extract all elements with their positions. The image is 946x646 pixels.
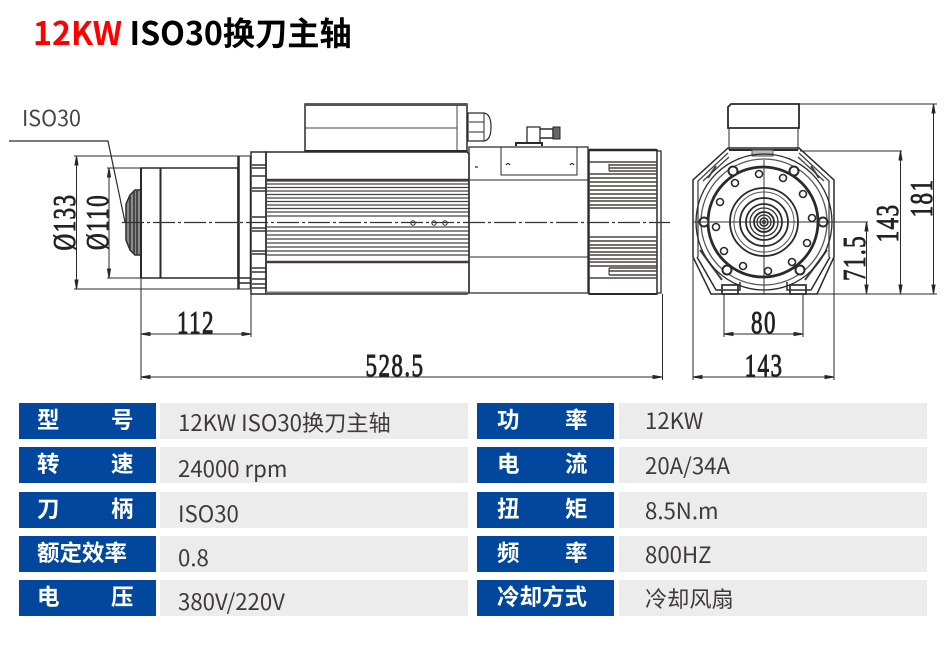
spec row: 扭矩: 矩 [565, 492, 588, 524]
spec row: 扭矩: 8.5N.m [645, 494, 719, 526]
dimension 71.5: 71.5 [837, 235, 873, 281]
spec row: 功率 [477, 403, 927, 439]
terminal box [305, 104, 467, 152]
spec row: 刀柄: 刀 [37, 492, 60, 524]
dimension 181 [799, 104, 940, 294]
dimension 80 [724, 294, 803, 341]
spec row: 冷却方式: 冷却风扇 [645, 582, 734, 614]
center line [122, 222, 670, 224]
dimension 112 [141, 278, 251, 380]
dimension 528.5 [141, 294, 662, 384]
dimension 143 width [693, 257, 834, 384]
spec row: 功率: 功 [497, 403, 520, 435]
spec row: 电压: 压 [111, 580, 134, 612]
spec row: 电流: 流 [565, 447, 588, 479]
spec row: 功率: 率 [565, 403, 588, 435]
spec row: 型号: 12KW ISO30换刀主轴 [178, 406, 391, 438]
ISO30 leader line [9, 141, 125, 222]
spec row: 冷却方式: 冷却方式 [497, 580, 587, 612]
spec row: 额定效率: 额定效率 [37, 536, 127, 568]
side view of spindle [122, 104, 670, 294]
spec row: 转速: 转 [37, 447, 60, 479]
chuck housing [141, 156, 251, 289]
dimension 143 height: 143 [870, 204, 906, 242]
spec row: 转速: 24000 rpm [178, 452, 287, 484]
spec row: 功率: 12KW [645, 404, 703, 436]
dimension 143 width: 143 [745, 348, 783, 384]
spec row: 扭矩 [477, 492, 927, 528]
air fitting [516, 127, 560, 146]
cross center lines [693, 160, 868, 294]
spec row: 电压: 电 [37, 580, 60, 612]
spec row: 频率 [477, 536, 927, 572]
dimension Ø110: Ø110 [80, 194, 116, 250]
spec row: 转速 [19, 447, 468, 484]
terminal box top [728, 104, 799, 150]
spec row: 型号: 号 [111, 403, 134, 435]
middle section [469, 147, 588, 293]
dimension 112: 112 [177, 305, 215, 341]
concentric rings [696, 154, 832, 290]
spec row: 电压 [19, 580, 468, 617]
cable gland [468, 113, 491, 141]
spec row: 刀柄: ISO30 [178, 497, 239, 529]
spindle nose [126, 190, 141, 255]
title: 12KW ISO30换刀主轴 [33, 9, 352, 55]
fan cover [589, 150, 661, 294]
technical drawing [9, 102, 940, 384]
spec row: 电流 [477, 447, 927, 483]
spec row: 电流: 20A/34A [645, 449, 730, 481]
spec row: 频率: 800HZ [645, 538, 711, 570]
small bolts [712, 170, 816, 274]
spec row: 转速: 速 [111, 447, 134, 479]
spec row: 扭矩: 扭 [497, 492, 520, 524]
spec row: 型号 [19, 403, 468, 439]
spec row: 冷却方式 [477, 580, 927, 616]
octagonal housing [693, 148, 834, 294]
dimension Ø133: Ø133 [47, 194, 83, 250]
dimension 528.5: 528.5 [365, 348, 425, 384]
dimension 143 height [800, 151, 906, 294]
dimension 181: 181 [904, 179, 940, 217]
large bolts [700, 166, 828, 274]
front view of spindle [693, 104, 868, 294]
dimension 80: 80 [751, 305, 777, 341]
spec row: 频率: 频 [497, 536, 520, 568]
spec row: 型号: 型 [37, 403, 60, 435]
motor body with fins [266, 152, 469, 294]
dimension 71.5 [837, 222, 873, 294]
spec row: 刀柄: 柄 [111, 492, 134, 524]
spec row: 额定效率: 0.8 [178, 541, 209, 573]
dimension Ø133 [47, 156, 250, 289]
spec row: 电流: 电 [497, 447, 520, 479]
spec row: 电压: 380V/220V [178, 585, 285, 617]
spec row: 额定效率 [19, 536, 468, 573]
spec row: 频率: 率 [565, 536, 588, 568]
front flange [251, 152, 266, 294]
dimension Ø110 [80, 168, 141, 278]
ISO30 callout: ISO30 [22, 102, 81, 133]
spec row: 刀柄 [19, 492, 468, 529]
